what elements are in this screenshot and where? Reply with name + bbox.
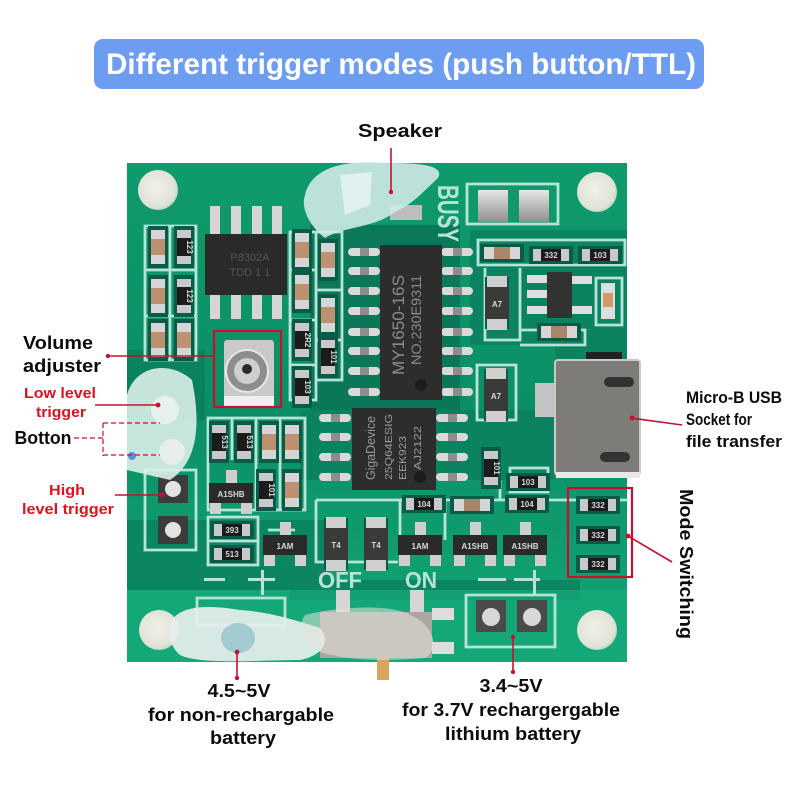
label: non-rechargeable battery: battery [210,727,277,748]
main chip MY1650-16S: MY1650-16S [389,275,408,375]
label: high level trigger: High [49,483,85,499]
label: non-rechargeable battery: for non-rechargable [148,704,334,725]
left passive components: 123 [185,240,194,254]
top right components: 332 [544,251,558,260]
lower middle components: 1AM [412,542,429,551]
silkscreen outlines [145,184,628,647]
top right components: 103 [593,251,607,260]
lower middle components: A1SHB [461,542,489,551]
mode switching resistors: 332 [591,531,605,540]
darker copper traces [127,225,627,662]
lower middle components: 103 [521,478,535,487]
silkscreen labels: BUSY [431,185,464,242]
silkscreen labels: ON [405,567,437,593]
label: low level trigger: trigger [36,405,86,421]
label: lithium battery [402,635,620,744]
top right components [480,244,622,422]
lower middle components [324,447,550,571]
amplifier chip P8302: P8302A [230,252,270,264]
label: mode switching: Mode Switching [676,489,697,639]
label: mode switching [568,488,697,639]
label: micro-B USB socket [630,388,782,451]
title [94,39,704,89]
left passive components [148,226,338,408]
lower left components: A1SHB [217,490,245,499]
lower left components: 513 [225,550,239,559]
left passive components: 103 [303,380,312,394]
label: volume adjuster: adjuster [23,355,101,376]
micro-B USB socket [535,352,640,478]
flash chip GigaDevice: EEK923 [398,435,409,480]
circuit board [127,162,640,680]
left passive components: 123 [185,289,194,303]
label: lithium battery: 3.4~5V [480,675,543,696]
label: non-rechargeable battery: 4.5~5V [208,680,271,701]
mode switching resistors: 332 [591,560,605,569]
top right components: A7 [492,300,503,309]
label: micro-B USB socket: Micro-B USB [686,388,782,407]
label: non-rechargeable battery [148,650,334,748]
flash chip GigaDevice: GigaDevice [364,416,378,480]
lower left components [209,421,307,566]
silkscreen labels [204,185,540,595]
lower middle components: 101 [492,461,501,475]
label: low level trigger: Low level [24,386,96,402]
volume potentiometer [224,340,274,406]
lower left components: 101 [267,483,276,497]
slide switch [320,590,454,680]
label: volume adjuster: Volume [23,332,93,353]
label: volume adjuster [23,331,281,407]
lower middle components: T4 [331,541,341,550]
label: lithium battery: lithium battery [445,723,582,744]
label: micro-B USB socket: file transfer [686,432,782,451]
silkscreen labels: OFF [318,567,362,593]
speaker pads [390,190,549,222]
label: button [14,423,160,456]
flash chip GigaDevice: AJ2122 [413,425,424,470]
mode switching resistors [576,496,620,573]
lower left components: 1AM [277,542,294,551]
label: speaker: Speaker [358,120,442,141]
flash chip GigaDevice: 25Q64ESIG [384,414,395,480]
translucent glue blobs [127,162,439,661]
amplifier chip P8302 [205,206,287,319]
top right components: A7 [491,392,502,401]
label: high level trigger [22,483,164,518]
lower left components: 513 [245,435,254,449]
lower middle components: T4 [371,541,381,550]
mode switching resistors: 332 [591,501,605,510]
label: micro-B USB socket: Socket for [686,410,752,429]
title: Different trigger modes (push button/TTL) [106,48,696,81]
label: low level trigger [24,386,160,421]
label: speaker [358,120,442,194]
label: high level trigger: level trigger [22,502,114,518]
lower left components: 393 [225,526,239,535]
battery pads right [476,600,547,632]
lower middle components: 104 [417,500,431,509]
flash chip GigaDevice [319,408,468,490]
lower middle components: A1SHB [511,542,539,551]
main chip MY1650-16S: NO.230E9311 [408,275,424,365]
lower left components: 513 [220,435,229,449]
label: button: Botton [14,427,72,448]
main chip MY1650-16S [348,245,473,400]
left passive components: 2R2 [303,333,312,348]
lower middle components: 104 [520,500,534,509]
label: lithium battery: for 3.7V rechargergable [402,699,620,720]
amplifier chip P8302: TDD 1 1 [230,267,270,279]
mounting holes [138,170,617,650]
trigger button pads [158,475,188,544]
left passive components: 101 [329,350,338,364]
